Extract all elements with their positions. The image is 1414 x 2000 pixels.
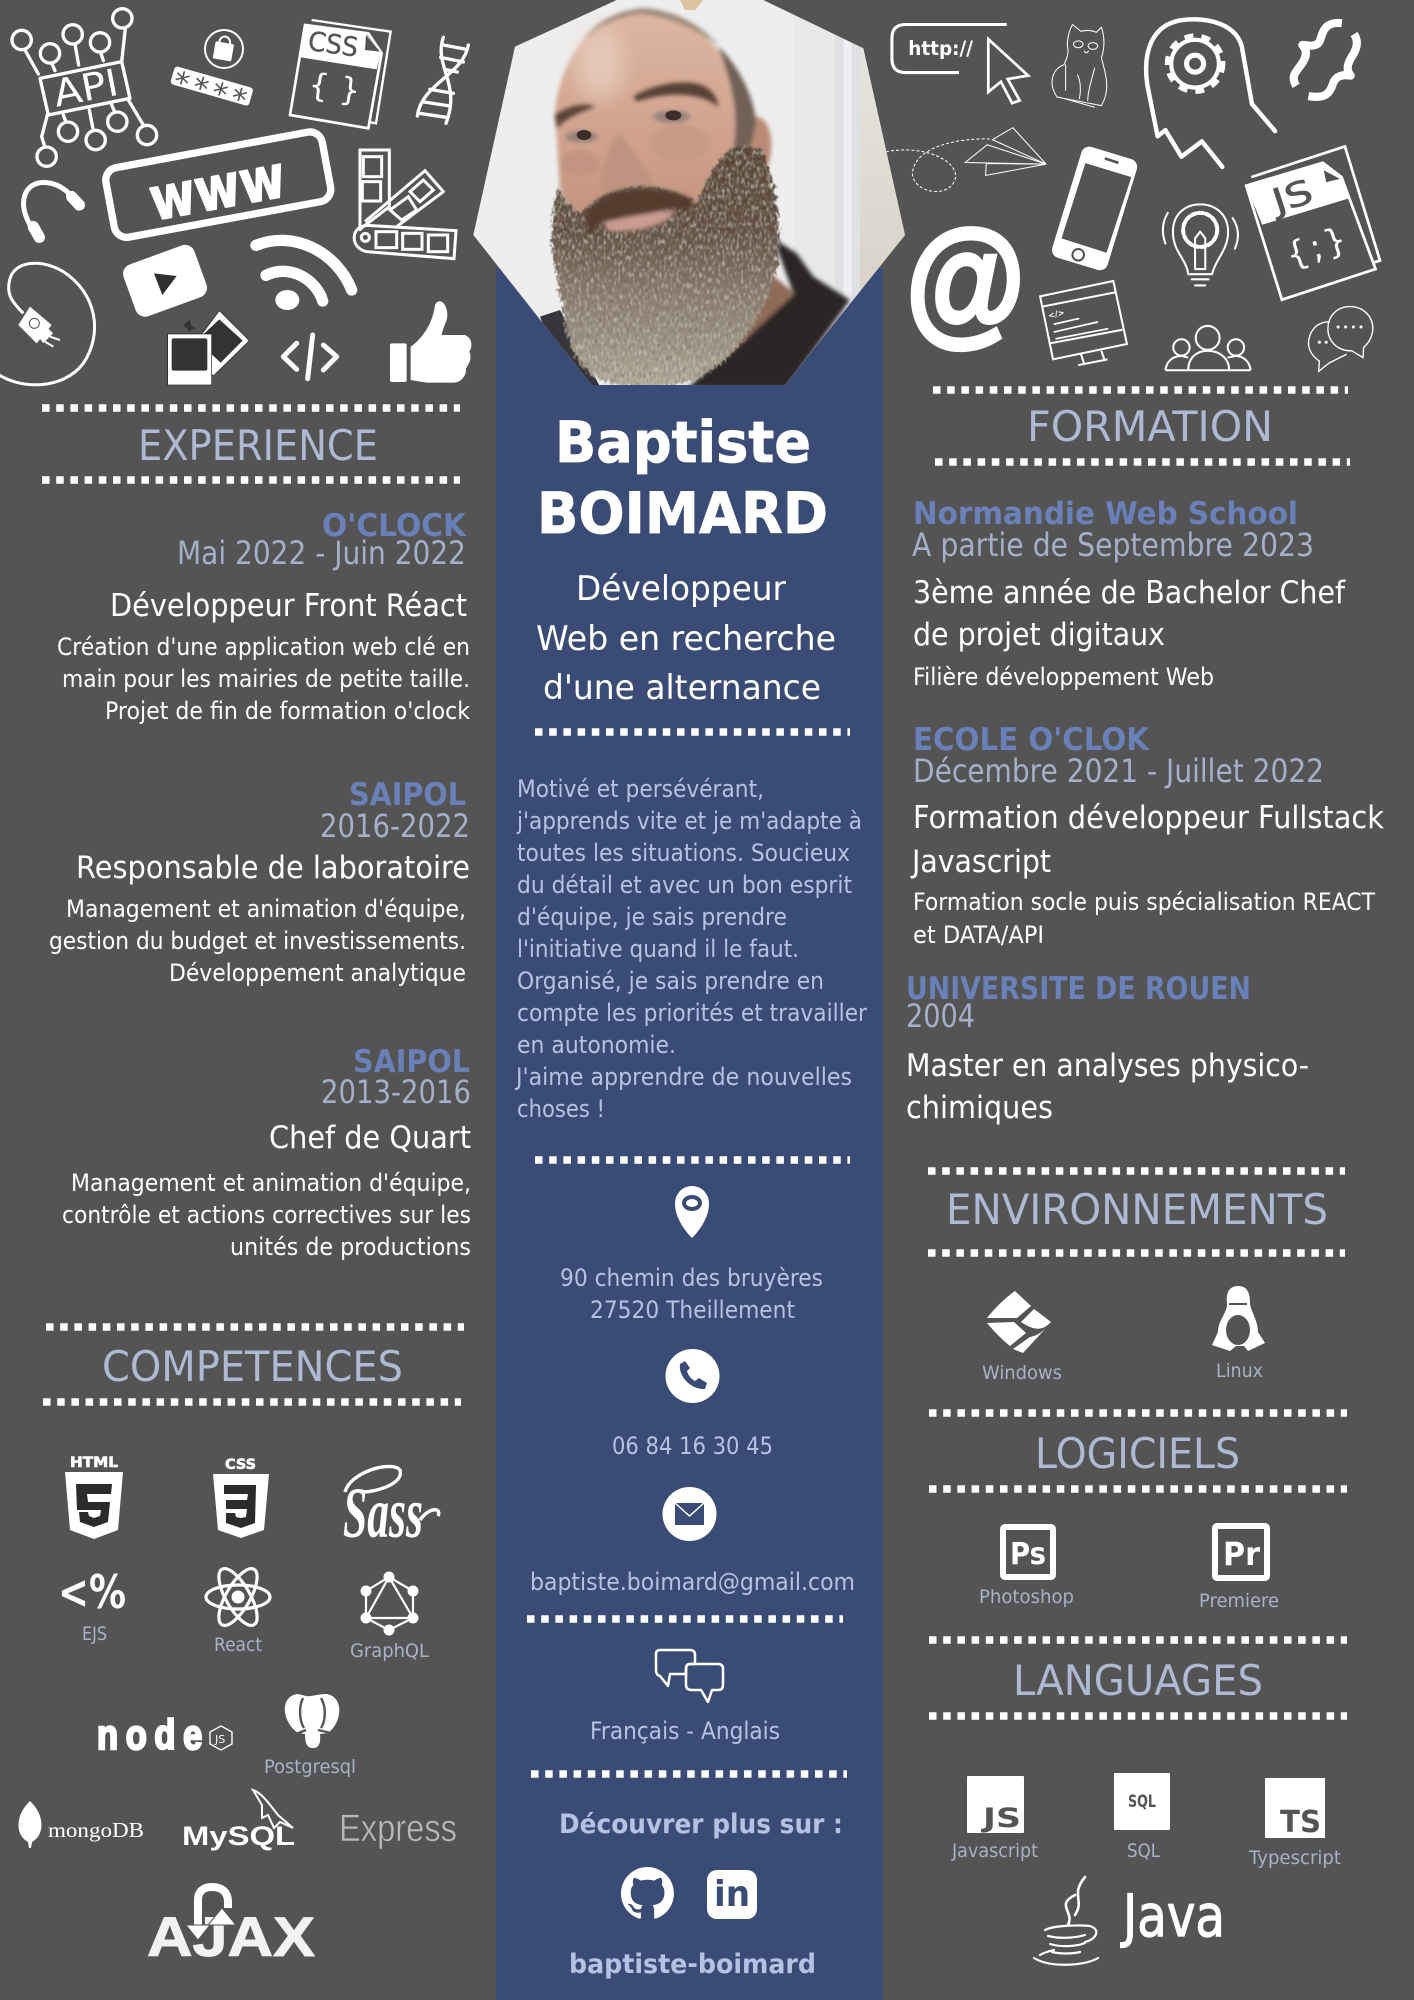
school: Ecole O'Clok xyxy=(910,722,1384,949)
icon: CSS file xyxy=(290,20,391,128)
icon: CSS3 xyxy=(213,1457,269,1538)
icon: Photoshop xyxy=(979,1527,1074,1608)
text block: presentation: choses ! xyxy=(517,1095,605,1123)
job: Saipol 2016-2022: SAIPOL xyxy=(349,777,466,813)
text block: presentation: en autonomie. xyxy=(517,1031,676,1059)
icon: WWW box xyxy=(104,130,333,239)
social links xyxy=(559,1809,843,1980)
icon: thumbs up xyxy=(390,301,471,383)
icon: Sass xyxy=(343,1466,439,1553)
icon: React xyxy=(206,1563,270,1656)
social links: Découvrer plus sur : xyxy=(559,1809,843,1840)
icon: GraphQL: GraphQL xyxy=(350,1640,429,1662)
contact: address: 27520 Theillement xyxy=(590,1296,795,1324)
icon: http bar: http:// xyxy=(908,37,974,60)
icon: mongoDB: mongoDB xyxy=(48,1818,144,1842)
icon: code window xyxy=(1040,281,1127,365)
icon: photos xyxy=(168,311,249,385)
school: Ecole O'Clok: Javascript xyxy=(910,844,1051,880)
icon: code window: </> xyxy=(1047,307,1065,320)
icon: JS file xyxy=(1246,146,1380,300)
school: Ecole O'Clok: Formation développeur Fullstack xyxy=(913,800,1384,836)
icon: http bar xyxy=(892,25,1007,73)
icon: Node.js: JS xyxy=(214,1733,225,1746)
icon: MySQL xyxy=(182,1790,295,1851)
heading: environnements: ENVIRONNEMENTS xyxy=(946,1185,1328,1234)
icon: SQL: SQL xyxy=(1127,1840,1160,1862)
icon: Javascript: JS xyxy=(980,1803,1021,1834)
icon: Windows xyxy=(982,1291,1062,1384)
icon: idea bulb xyxy=(1163,204,1238,285)
contact: email: baptiste.boimard@gmail.com xyxy=(530,1568,855,1596)
icon: paper plane xyxy=(887,128,1046,192)
heading: experience: EXPERIENCE xyxy=(138,421,378,470)
school: Universite de Rouen: Master en analyses physico- xyxy=(906,1048,1309,1084)
icon: SQL xyxy=(1114,1773,1170,1862)
school: Normandie Web School: 3ème année de Bachelor Chef xyxy=(913,575,1346,611)
icon: wifi xyxy=(256,240,352,310)
icon: password xyxy=(169,30,254,119)
job: Saipol 2013-2016: Management et animation d'équipe, xyxy=(71,1169,471,1197)
icon: JS file: JS xyxy=(1265,172,1318,222)
icon: head with gear xyxy=(1146,19,1275,167)
icon: MySQL: MySQL xyxy=(182,1821,295,1851)
name: BOIMARD xyxy=(537,481,828,547)
icon: JS file: {;} xyxy=(1281,219,1352,276)
icon: CSS file: { } xyxy=(306,65,363,110)
school: Universite de Rouen: chimiques xyxy=(906,1090,1053,1126)
icon: Typescript: TS xyxy=(1280,1805,1321,1840)
icon: CSS3: CSS xyxy=(225,1457,256,1473)
icon: power cable xyxy=(0,263,95,385)
icon: Typescript xyxy=(1248,1778,1341,1869)
social links: baptiste-boimard xyxy=(569,1949,816,1980)
heading: logiciels: LOGICIELS xyxy=(1035,1429,1240,1478)
icon: Sass: Sass xyxy=(343,1473,423,1553)
icon: Windows: Windows xyxy=(982,1362,1062,1384)
icon: Express: Express xyxy=(339,1808,457,1850)
icon: mongoDB xyxy=(18,1801,144,1848)
text block: presentation: Organisé, je sais prendre en xyxy=(517,967,824,995)
job: O'Clock: Développeur Front Réact xyxy=(110,588,467,624)
contact: phone: 06 84 16 30 45 xyxy=(612,1432,773,1460)
job: Saipol 2013-2016 xyxy=(62,1044,471,1261)
job: Saipol 2016-2022: Management et animation d'équipe, xyxy=(66,895,466,923)
text block: presentation: du détail et avec un bon esprit xyxy=(517,871,852,899)
icon: headset xyxy=(24,182,79,237)
school: Normandie Web School: Normandie Web School xyxy=(913,496,1298,532)
icon: colour swatch xyxy=(354,150,456,259)
heading: competences: COMPETENCES xyxy=(102,1342,403,1391)
icon: GraphQL xyxy=(350,1572,429,1662)
icon: curly braces xyxy=(1294,23,1357,97)
languages spoken xyxy=(590,1650,780,1745)
school: Ecole O'Clok: Formation socle puis spécialisation REACT xyxy=(913,888,1375,916)
school: Universite de Rouen xyxy=(906,971,1309,1126)
job: Saipol 2013-2016: Chef de Quart xyxy=(269,1120,471,1156)
job title xyxy=(536,569,836,708)
job: O'Clock: Mai 2022 - Juin 2022 xyxy=(177,534,466,572)
job: Saipol 2013-2016: SAIPOL xyxy=(353,1044,470,1080)
job: Saipol 2013-2016: contrôle et actions correctives sur les xyxy=(62,1201,471,1229)
icon: LinkedIn: in xyxy=(714,1874,750,1915)
job title: Web en recherche xyxy=(536,619,836,659)
photo: portrait in polygon frame xyxy=(473,0,905,385)
icon: Photoshop: Photoshop xyxy=(979,1586,1074,1608)
icon: Photoshop: Ps xyxy=(1010,1537,1046,1572)
job: Saipol 2016-2022: Responsable de laboratoire xyxy=(76,850,470,886)
icon: WWW box: www xyxy=(144,142,291,235)
job title: d'une alternance xyxy=(543,668,821,708)
panel: competences xyxy=(18,1327,464,1968)
school: Ecole O'Clok: ECOLE O'CLOK xyxy=(913,722,1150,758)
icon: API chip: API xyxy=(50,60,122,116)
icon: HTML5: HTML xyxy=(70,1455,118,1471)
icon: React: React xyxy=(214,1634,262,1656)
school: Normandie Web School: de projet digitaux xyxy=(913,617,1165,653)
icon: AJAX xyxy=(147,1887,315,1968)
name xyxy=(537,410,828,547)
school: Normandie Web School: A partie de Septembre 2023 xyxy=(912,526,1314,564)
icon: Javascript: Javascript xyxy=(951,1840,1038,1862)
icon: DNA xyxy=(417,37,468,123)
text block: presentation: l'initiative quand il le faut. xyxy=(517,935,799,963)
icon: Premiere: Pr xyxy=(1223,1535,1260,1573)
school: Normandie Web School: Filière développement Web xyxy=(913,663,1214,691)
panel: formation xyxy=(906,390,1384,1126)
icon: Java: Java xyxy=(1121,1882,1225,1950)
heading: formation: FORMATION xyxy=(1027,402,1273,451)
text block: presentation: J'aime apprendre de nouvelles xyxy=(514,1063,852,1091)
job: Saipol 2016-2022: 2016-2022 xyxy=(320,807,470,845)
icon: smartphone xyxy=(1050,145,1139,272)
icon: at sign: @ xyxy=(904,204,1023,360)
school: Universite de Rouen: UNIVERSITE DE ROUEN xyxy=(906,971,1251,1007)
text block: presentation: compte les priorités et travailler xyxy=(517,999,867,1027)
school: Normandie Web School xyxy=(912,496,1346,691)
icon: password: **** xyxy=(169,65,250,119)
job: O'Clock: main pour les mairies de petite taille. xyxy=(62,665,470,693)
job: O'Clock: Création d'une application web clé en xyxy=(57,633,470,661)
heading: languages: LANGUAGES xyxy=(1013,1656,1263,1705)
text block: presentation: j'apprends vite et je m'adapte à xyxy=(516,807,862,835)
icon: Linux xyxy=(1212,1286,1265,1382)
text block: presentation: Motivé et persévérant, xyxy=(517,775,764,803)
text block: presentation: d'équipe, je sais prendre xyxy=(517,903,787,931)
contact: email xyxy=(530,1487,855,1596)
icon: HTML5 xyxy=(65,1455,123,1539)
icon: EJS: EJS xyxy=(82,1623,107,1645)
school: Ecole O'Clok: Décembre 2021 - Juillet 2022 xyxy=(913,752,1324,790)
text block: presentation xyxy=(514,775,867,1123)
icon: CSS file: CSS xyxy=(306,26,360,64)
icon: Typescript: Typescript xyxy=(1248,1847,1341,1869)
job: O'Clock: Projet de fin de formation o'clock xyxy=(105,697,470,725)
job: Saipol 2013-2016: unités de productions xyxy=(230,1233,471,1261)
icon: Node.js: node xyxy=(97,1712,202,1759)
contact: phone xyxy=(612,1349,773,1460)
icon: cat xyxy=(1052,25,1107,107)
job: Saipol 2016-2022: Développement analytique xyxy=(169,959,466,987)
icon: Premiere: Premiere xyxy=(1199,1590,1279,1612)
panel: languages xyxy=(929,1640,1347,1965)
panel: experience xyxy=(42,408,471,1261)
panel: logiciels xyxy=(929,1413,1347,1612)
icon: team xyxy=(1165,326,1251,370)
icon: Postgresql: Postgresql xyxy=(264,1756,356,1778)
contact: address xyxy=(560,1186,823,1324)
icon: Linux: Linux xyxy=(1216,1360,1263,1382)
job: Saipol 2016-2022 xyxy=(49,777,470,987)
icon: Premiere xyxy=(1199,1526,1279,1612)
icon: LinkedIn xyxy=(707,1870,757,1919)
icon: Javascript xyxy=(951,1776,1038,1862)
icon: SQL: SQL xyxy=(1128,1792,1156,1812)
icon: cursor xyxy=(988,39,1028,103)
icon: EJS xyxy=(58,1565,126,1645)
job: Saipol 2016-2022: gestion du budget et investissements. xyxy=(49,927,466,955)
panel: environnements xyxy=(928,1171,1345,1384)
panel: identity xyxy=(514,410,867,1980)
contact: address: 90 chemin des bruyères xyxy=(560,1264,823,1292)
doodle icons: top left xyxy=(0,9,471,385)
icon: API chip xyxy=(12,9,157,166)
text block: presentation: toutes les situations. Soucieux xyxy=(517,839,850,867)
icon: AJAX: AJAX xyxy=(147,1905,315,1968)
job title: Développeur xyxy=(576,569,786,609)
languages spoken: Français - Anglais xyxy=(590,1717,780,1745)
icon: GitHub xyxy=(621,1867,674,1919)
name: Baptiste xyxy=(555,410,811,476)
job: O'Clock xyxy=(57,508,470,725)
icon: code tag xyxy=(283,335,337,379)
doodle icons: top right xyxy=(887,19,1380,371)
job: Saipol 2013-2016: 2013-2016 xyxy=(321,1073,471,1111)
icon: Java xyxy=(1034,1877,1225,1965)
central blue column xyxy=(496,268,883,2000)
school: Universite de Rouen: 2004 xyxy=(906,997,975,1035)
job: O'Clock: O'CLOCK xyxy=(322,508,467,544)
school: Ecole O'Clok: et DATA/API xyxy=(913,921,1044,949)
icon: chat bubbles xyxy=(1308,307,1373,371)
icon: video play xyxy=(120,242,210,320)
icon: EJS: <% xyxy=(58,1565,126,1619)
icon: Postgresql xyxy=(264,1694,356,1778)
